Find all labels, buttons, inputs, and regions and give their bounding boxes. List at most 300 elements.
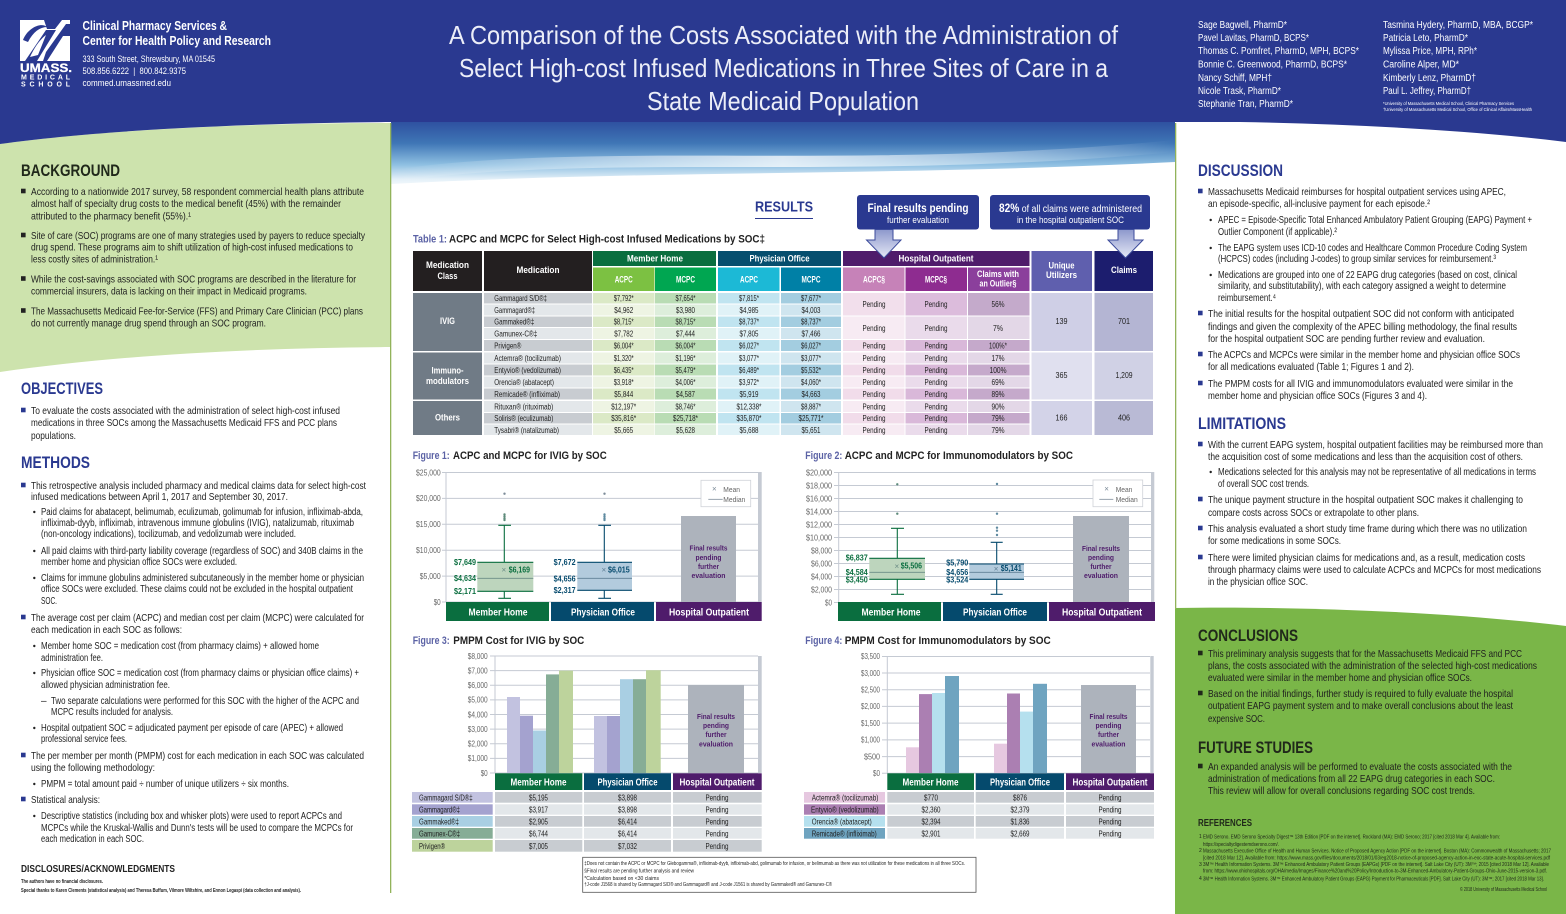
section: methods: Claims for immune globulins administered subcutaneously in the member home or physician bbox=[41, 573, 364, 584]
hospital outpatient pending block bbox=[688, 685, 744, 773]
claims with an outlier column: 69% bbox=[992, 377, 1005, 387]
figure 2 grid and axis: $0 bbox=[825, 598, 832, 607]
physician office ACPC column: $4,985 bbox=[740, 305, 759, 315]
figure 2 grid and axis: $14,000 bbox=[806, 507, 832, 516]
arrow: to hospital outpatient bbox=[866, 230, 901, 258]
section: methods: Two separate calculations were performed for this SOC with the higher of the ACPC and bbox=[51, 696, 359, 707]
section: objectives: To evaluate the costs associated with the administration of select high-cost infused bbox=[31, 406, 340, 417]
figure 4 data table: $770 bbox=[924, 792, 938, 802]
member home box plot: $2,171 bbox=[454, 586, 476, 596]
figure 3 data table bbox=[412, 792, 762, 852]
figure 2 category labels: Physician Office bbox=[963, 608, 1027, 618]
physician office ACPC column: $6,489* bbox=[739, 365, 759, 375]
claims with an outlier column: 79% bbox=[992, 413, 1005, 423]
figure 4 grid and axis bbox=[861, 652, 1154, 778]
section: background: BACKGROUND bbox=[21, 161, 120, 180]
figure 3 grid and axis: $2,000 bbox=[468, 740, 488, 749]
section: discussion: Outlier Component (if applicable).² bbox=[1218, 227, 1338, 238]
section: methods: All paid claims with third-party liability coverage (regardless of SOC) and 340B claims in the bbox=[41, 546, 363, 557]
hospital outpatient pending block: Final results bbox=[1090, 712, 1128, 721]
physician office ACPC column: $5,919 bbox=[740, 389, 759, 399]
section: methods: PMPM = total amount paid ÷ number of unique utilizers ÷ six months. bbox=[41, 779, 289, 790]
table header row: Unique bbox=[1048, 260, 1074, 270]
figure 4 grid and axis: $1,000 bbox=[861, 736, 880, 745]
hospital outpatient pending block: evaluation bbox=[692, 571, 726, 580]
figure 4 chart bbox=[804, 652, 1154, 839]
authors: Paul L. Jeffrey, PharmD† bbox=[1383, 86, 1471, 97]
hospital outpatient pending block: further bbox=[1098, 730, 1119, 739]
table and figure footnotes: §Final results are pending further analysis and review bbox=[584, 869, 694, 875]
medication class cells bbox=[413, 293, 482, 435]
member home box plot bbox=[454, 492, 533, 598]
section: methods: (non-oncology indications), tocilizumab, and vedolizumab were included. bbox=[41, 529, 296, 540]
authors: Tasmina Hydery, PharmD, MBA, BCGP* bbox=[1383, 20, 1533, 31]
claims column bbox=[1094, 293, 1153, 435]
physician office ACPC column: $8,737* bbox=[739, 317, 759, 327]
member home ACPC column: $12,197* bbox=[611, 402, 637, 412]
member home box plot: × bbox=[502, 566, 506, 575]
references: 1 bbox=[1199, 834, 1202, 840]
claims with an outlier column: 56% bbox=[992, 299, 1005, 309]
figure 2 legend: Median bbox=[1116, 497, 1138, 504]
figure 3 grid and axis: $6,000 bbox=[468, 681, 488, 690]
hospital outpatient ACPC column: Pending bbox=[862, 323, 886, 333]
unique utilizers column: 365 bbox=[1056, 370, 1068, 380]
section: methods: MCPC results included for analysis. bbox=[51, 707, 173, 718]
section: methods: SOC. bbox=[41, 596, 57, 607]
claims with an outlier column: 100%* bbox=[989, 340, 1007, 350]
hospital outpatient ACPC column: Pending bbox=[862, 389, 886, 399]
title bbox=[449, 20, 1119, 116]
section: background: Site of care (SOC) programs are one of many strategies used by payers to reduce specialty bbox=[31, 231, 366, 242]
figure 3 grid and axis: $5,000 bbox=[468, 696, 488, 705]
figure 4 title: PMPM Cost for Immunomodulators by SOC bbox=[845, 635, 1051, 647]
figure 3 title: PMPM Cost for IVIG by SOC bbox=[453, 635, 584, 647]
physician office box plot: $4,656 bbox=[946, 567, 969, 577]
medication name cells: Gamunex-C®‡ bbox=[494, 328, 538, 338]
section: methods: administration fee. bbox=[41, 653, 103, 664]
disclosures and acknowledgments: Special thanks to Karen Clements (statistical analysis) and Theresa Buffum, Vilmore Wiltshire, and Ennon Legaspi (data collection and analysis). bbox=[21, 888, 301, 894]
physician office box plot: $2,317 bbox=[554, 585, 576, 595]
section: limitations: for some medications in some SOCs. bbox=[1208, 536, 1341, 547]
figure 1 grid and axis: $0 bbox=[434, 598, 441, 607]
figure 3 grid and axis: $4,000 bbox=[468, 710, 488, 719]
section: limitations bbox=[1198, 414, 1543, 588]
figure 3 data table: Pending bbox=[706, 804, 729, 814]
member home MCPC column: $7,444 bbox=[676, 328, 695, 338]
authors: Caroline Alper, MD* bbox=[1383, 60, 1459, 70]
section: limitations: LIMITATIONS bbox=[1198, 414, 1286, 433]
table header row: MCPC bbox=[676, 274, 695, 284]
medication name cells: Entyvio® (vedolizumab) bbox=[494, 365, 561, 375]
callout: 82 percent of claims: 82% of all claims were administered bbox=[999, 203, 1142, 215]
figure 3 data table: Pending bbox=[706, 841, 729, 851]
figure 4 data table: $876 bbox=[1013, 792, 1027, 802]
member home MCPC column: $3,980 bbox=[676, 305, 695, 315]
figure 2 grid and axis: $16,000 bbox=[806, 494, 832, 503]
table header row: ACPC§ bbox=[863, 274, 885, 284]
hospital outpatient pending block bbox=[1081, 685, 1136, 773]
claims column: 701 bbox=[1118, 316, 1130, 326]
figure 4 grid and axis: $0 bbox=[873, 769, 880, 778]
hospital outpatient pending block: further bbox=[1090, 562, 1112, 571]
figure 3 data table: Pending bbox=[706, 792, 729, 802]
figure 4 grid and axis: $1,500 bbox=[861, 719, 880, 728]
physician office ACPC column: $5,688 bbox=[740, 425, 759, 435]
organisation block: 333 South Street, Shrewsbury, MA 01545 bbox=[82, 54, 215, 65]
physician office MCPC column: $8,887* bbox=[801, 402, 821, 412]
title: Select High-cost Infused Medications in Three Sites of Care in a bbox=[459, 53, 1108, 83]
section: background: While the cost-savings associated with SOC programs are described in the literature for bbox=[31, 274, 356, 286]
section: objectives: OBJECTIVES bbox=[21, 379, 103, 398]
figure 4 data table bbox=[804, 792, 1154, 839]
physician office ACPC column: $3,972* bbox=[739, 377, 759, 387]
member home ACPC column: $1,320* bbox=[614, 353, 634, 363]
member home ACPC column: $5,844 bbox=[614, 389, 633, 399]
medication name cells: Actemra® (tocilizumab) bbox=[494, 353, 561, 363]
hospital outpatient MCPC column: Pending bbox=[924, 389, 948, 399]
hospital outpatient ACPC column: Pending bbox=[862, 365, 886, 375]
figure 4 grid and axis: $3,500 bbox=[861, 652, 880, 661]
figure 4 category labels bbox=[887, 773, 1154, 790]
authors: Thomas C. Pomfret, PharmD, MPH, BCPS* bbox=[1198, 46, 1359, 57]
section: conclusions: expensive SOC. bbox=[1208, 714, 1265, 725]
figure 3 data table: Gamunex-C®‡ bbox=[419, 828, 460, 838]
authors: Mylissa Price, MPH, RPh* bbox=[1383, 46, 1477, 57]
section: objectives: populations. bbox=[31, 431, 76, 442]
unique utilizers column: 166 bbox=[1056, 413, 1068, 423]
member home MCPC column: $6,004* bbox=[676, 340, 696, 350]
figure 1 grid and axis: $20,000 bbox=[416, 494, 441, 503]
table header row: ACPC bbox=[615, 274, 633, 284]
table header row: Medication bbox=[426, 260, 469, 270]
member home MCPC column: $7,654* bbox=[676, 293, 696, 303]
figure 1 legend: Median bbox=[723, 497, 745, 504]
section: future studies: administration of medications from all 22 EAPG drug categories in each SOC. bbox=[1208, 774, 1495, 785]
hospital outpatient pending block: Final results bbox=[1082, 544, 1120, 553]
table 1 bbox=[413, 251, 1153, 435]
figure 3 data table: $5,195 bbox=[529, 792, 548, 802]
hospital outpatient MCPC column: Pending bbox=[924, 323, 948, 333]
organisation block: Clinical Pharmacy Services & bbox=[82, 18, 227, 33]
references: [cited 2018 Mar 12]. Available from: https://www.mass.gov/files/documents/2018/01/03/eg2018-notice-of-proposed-agency-action-in-eoc-state-acute-hospital-services.pdf bbox=[1203, 856, 1551, 862]
figure 4 title: Figure 4: bbox=[805, 635, 842, 647]
hospital outpatient MCPC column: Pending bbox=[924, 353, 948, 363]
figure 1 category labels: Physician Office bbox=[571, 608, 635, 618]
physician office ACPC column: $35,870* bbox=[736, 413, 762, 423]
member home MCPC column: $8,715* bbox=[676, 317, 696, 327]
hospital outpatient pending block: pending bbox=[1088, 553, 1114, 562]
callout: 82 percent of claims bbox=[990, 195, 1150, 230]
figure 3 grid and axis: $0 bbox=[481, 769, 488, 778]
organisation block bbox=[82, 18, 271, 89]
hospital outpatient MCPC column: Pending bbox=[924, 299, 948, 309]
medication name cells: Rituxan® (rituximab) bbox=[494, 402, 553, 412]
section: discussion: member home and physician office SOCs (Figures 3 and 4). bbox=[1208, 391, 1427, 402]
figure 3 grid and axis: $1,000 bbox=[468, 754, 488, 763]
member home ACPC column: $35,816* bbox=[611, 413, 637, 423]
disclosures and acknowledgments bbox=[21, 863, 301, 894]
authors: Nancy Schiff, MPH† bbox=[1198, 73, 1272, 84]
hospital outpatient MCPC column: Pending bbox=[924, 402, 948, 412]
figure 4 data table: $2,379 bbox=[1010, 804, 1030, 814]
section: objectives bbox=[21, 379, 340, 442]
figure 4 category labels: Hospital Outpatient bbox=[1072, 778, 1148, 788]
table header row: Medication bbox=[516, 265, 560, 275]
arrow: to claims bbox=[1108, 230, 1143, 258]
table header row: Utilizers bbox=[1046, 270, 1077, 280]
physician office MCPC column: $4,003 bbox=[802, 305, 821, 315]
figure 3 data table: $3,917 bbox=[529, 804, 548, 814]
claims with an outlier column: 79% bbox=[992, 425, 1005, 435]
section: future studies: This review will allow for overall conclusions regarding SOC cost trends. bbox=[1208, 786, 1475, 797]
figure 4 grid and axis: $2,500 bbox=[861, 686, 880, 694]
table header row: ACPC bbox=[740, 274, 758, 284]
hospital outpatient pending block: Final results bbox=[690, 544, 728, 553]
figure 2 title: ACPC and MCPC for Immunomodulators by SOC bbox=[845, 450, 1073, 462]
hospital outpatient pending block bbox=[681, 516, 736, 602]
callout: final results pending: Final results pending bbox=[868, 203, 968, 215]
table header row: Claims with bbox=[977, 269, 1019, 279]
figure 4 data table: $2,394 bbox=[922, 816, 941, 826]
section: methods: Paid claims for abatacept, belimumab, eculizumab, golimumab for infusion, infliximab-abda, bbox=[41, 507, 363, 518]
logo: UMass Medical School: SCHOOL bbox=[21, 82, 71, 88]
figure 3 chart bbox=[412, 652, 762, 852]
figure 2 grid and axis bbox=[806, 468, 1154, 607]
figure 4 data table: $2,901 bbox=[922, 828, 941, 838]
section: methods: Statistical analysis: bbox=[31, 795, 100, 806]
hospital outpatient ACPC column: Pending bbox=[862, 377, 886, 387]
physician office MCPC column: $4,060* bbox=[801, 377, 821, 387]
figure 3 data table: Pending bbox=[706, 816, 729, 826]
medication class cells: Immuno- bbox=[432, 365, 464, 375]
physician office MCPC column: $4,663 bbox=[802, 389, 821, 399]
member home box plot: $3,450 bbox=[846, 575, 868, 585]
physician office MCPC column: $25,771* bbox=[798, 413, 824, 423]
table header row: an Outlier§ bbox=[980, 279, 1016, 289]
figure 3 category labels: Hospital Outpatient bbox=[680, 778, 755, 788]
section: methods: each medication in each SOC. bbox=[41, 834, 144, 845]
section: objectives: medications in three SOCs among the Massachusetts Medicaid FFS and PCC plans bbox=[31, 418, 337, 429]
section: methods: allowed physician administration fee. bbox=[41, 680, 170, 691]
figure 4 data table: $2,669 bbox=[1010, 828, 1030, 838]
physician office box plot: $6,015 bbox=[608, 565, 630, 575]
claims with an outlier column: 7% bbox=[993, 323, 1003, 333]
section: methods bbox=[21, 453, 366, 845]
figure 2 category labels: Member Home bbox=[862, 608, 921, 618]
authors: Pavel Lavitas, PharmD, BCPS* bbox=[1198, 33, 1309, 44]
hospital outpatient MCPC column: Pending bbox=[924, 377, 948, 387]
figure 2 category labels: Hospital Outpatient bbox=[1062, 608, 1143, 618]
figure 2 legend bbox=[1093, 480, 1143, 507]
authors: Sage Bagwell, PharmD* bbox=[1198, 20, 1287, 31]
physician office box plot: $5,141 bbox=[1001, 563, 1022, 573]
figure 3 data table: $7,032 bbox=[618, 841, 637, 851]
figure 1 category labels: Member Home bbox=[468, 608, 528, 618]
hospital outpatient pending block: evaluation bbox=[1084, 571, 1118, 580]
figure 4 data table: Remicade® (infliximab) bbox=[812, 828, 877, 838]
right column rule bbox=[1175, 123, 1176, 609]
physician office ACPC column: $12,338* bbox=[736, 402, 762, 412]
physician office box plot: $4,656 bbox=[554, 574, 576, 584]
figure 3 data table: $6,414 bbox=[618, 828, 637, 838]
claims column: 1,209 bbox=[1116, 370, 1133, 380]
member home MCPC column: $8,746* bbox=[676, 402, 696, 412]
section: methods: using the following methodology: bbox=[31, 763, 155, 774]
member home box plot: $4,634 bbox=[454, 573, 476, 583]
panel: background bbox=[0, 123, 390, 372]
physician office bars bbox=[994, 684, 1047, 773]
figure 3 category labels bbox=[495, 773, 762, 790]
disclosures and acknowledgments: DISCLOSURES/ACKNOWLEDGMENTS bbox=[21, 863, 175, 875]
figure 4 category labels: Physician Office bbox=[990, 778, 1050, 788]
figure 2 chart bbox=[806, 468, 1155, 621]
section: conclusions: evaluated were similar in the member home and physician office SOCs. bbox=[1208, 673, 1472, 684]
figure 1 title: ACPC and MCPC for IVIG by SOC bbox=[453, 450, 607, 462]
table 1 title: ACPC and MCPC for Select High-cost Infused Medications by SOC‡ bbox=[449, 234, 765, 246]
table header row: Hospital Outpatient bbox=[898, 254, 974, 264]
physician office ACPC column: $3,077* bbox=[739, 353, 759, 363]
figure 2 legend: Mean bbox=[1116, 487, 1132, 494]
hospital outpatient pending block: further bbox=[698, 562, 719, 571]
physician office MCPC column bbox=[781, 293, 841, 435]
section: background: less costly sites of administration.¹ bbox=[31, 254, 158, 266]
table header row: MCPC§ bbox=[925, 274, 947, 284]
hospital outpatient ACPC column: Pending bbox=[862, 402, 886, 412]
figure 3 grid and axis: $7,000 bbox=[468, 666, 488, 675]
figure 3 data table: Gammagard®‡ bbox=[419, 804, 460, 814]
section: methods: infliximab-dyyb, infliximab, intravenous immune globulins (IVIG), natalizumab, rituximab bbox=[41, 518, 354, 529]
hospital outpatient MCPC column: Pending bbox=[924, 425, 948, 435]
table 1 title: Table 1: bbox=[413, 234, 447, 246]
figure 1 legend: × bbox=[712, 484, 717, 494]
section: background: commercial insurers, data is lacking on their impact in Medicaid programs. bbox=[31, 286, 307, 298]
figure 1 category labels bbox=[446, 602, 762, 621]
figure 4 data table: Entyvio® (vedolizumab) bbox=[811, 804, 879, 814]
section: methods: – bbox=[41, 696, 47, 707]
section: discussion: for all medications evaluated (Table 1; Figures 1 and 2). bbox=[1208, 362, 1414, 373]
hospital outpatient ACPC column bbox=[843, 293, 904, 435]
references: 2 bbox=[1199, 848, 1202, 854]
figure 1 title: Figure 1: bbox=[413, 450, 450, 462]
hospital outpatient MCPC column: Pending bbox=[924, 413, 948, 423]
figure 2 grid and axis: $8,000 bbox=[811, 546, 832, 555]
medication name cells: Gammaked®‡ bbox=[494, 317, 534, 327]
medication name cells: Privigen® bbox=[494, 340, 522, 350]
section: methods: MCPCs while the Kruskal-Wallis and Dunn's tests will be used to compare the MCPCs for bbox=[41, 823, 354, 834]
figure 2 grid and axis: $10,000 bbox=[806, 533, 832, 542]
results heading: RESULTS bbox=[755, 198, 813, 216]
figure 2 title: Figure 2: bbox=[805, 450, 842, 462]
references: https://specialtydigestemdserono.com/. bbox=[1203, 842, 1279, 848]
table header row: Class bbox=[438, 271, 458, 281]
figure 4 data table: Actemra® (tocilizumab) bbox=[812, 792, 879, 802]
member home box plot: $6,169 bbox=[509, 565, 530, 575]
section: methods: office SOCs were excluded. These claims could not be excluded in the hospital outpatient bbox=[41, 584, 353, 595]
figure 1 category labels: Hospital Outpatient bbox=[669, 608, 750, 618]
figure 3 data table: $6,414 bbox=[618, 816, 637, 826]
physician office box plot: × bbox=[602, 566, 606, 575]
physician office MCPC column: $5,651 bbox=[802, 425, 821, 435]
member home box plot: $6,837 bbox=[846, 553, 868, 563]
figure 3 grid and axis: $3,000 bbox=[468, 725, 488, 734]
physician office bars bbox=[594, 670, 661, 773]
table and figure footnotes bbox=[583, 857, 976, 892]
hospital outpatient MCPC column bbox=[906, 293, 967, 435]
unique utilizers column bbox=[1032, 293, 1092, 435]
logo: UMass Medical School: MEDICAL bbox=[21, 74, 71, 82]
section: background: The Massachusetts Medicaid Fee-for-Service (FFS) and Primary Care Clinician (PCC) plans bbox=[31, 306, 363, 318]
header band bbox=[0, 0, 1566, 144]
member home box plot: $7,649 bbox=[454, 557, 476, 567]
figure 1 legend bbox=[701, 480, 751, 507]
member home ACPC column: $6,435* bbox=[614, 365, 634, 375]
section: conclusions bbox=[1198, 626, 1537, 725]
references: 3 bbox=[1199, 862, 1202, 868]
figure 2 grid and axis: $12,000 bbox=[806, 520, 832, 529]
figure 4 grid and axis: $2,000 bbox=[861, 702, 880, 711]
figure 4 data table: Pending bbox=[1098, 804, 1122, 814]
figure 1 chart bbox=[416, 468, 762, 621]
figure 1 grid and axis: $10,000 bbox=[416, 546, 441, 555]
medication class cells: Others bbox=[435, 413, 460, 423]
section: methods: Hospital outpatient SOC = adjudicated payment per episode of care (APEC) + allowed bbox=[41, 723, 343, 734]
references: 4 bbox=[1199, 876, 1202, 882]
section: methods: Descriptive statistics (including box and whisker plots) were used to report ACPCs and bbox=[41, 811, 342, 822]
table header row bbox=[413, 251, 1153, 291]
physician office MCPC column: $7,466 bbox=[802, 328, 821, 338]
claims with an outlier column: 100% bbox=[990, 365, 1007, 375]
physician office box plot bbox=[946, 483, 1024, 594]
authors: Bonnie C. Greenwood, PharmD, BCPS* bbox=[1198, 60, 1347, 70]
figure 3 title: Figure 3: bbox=[413, 635, 450, 647]
member home ACPC column: $7,782 bbox=[614, 328, 633, 338]
figure 2 grid and axis: $6,000 bbox=[811, 559, 832, 568]
section: discussion: an episode-specific, all-inclusive payment for each episode.² bbox=[1208, 199, 1430, 210]
member home ACPC column: $5,665 bbox=[614, 425, 633, 435]
panel: conclusions background bbox=[1175, 608, 1566, 914]
section: background: drug spend. These programs aim to shift utilization of high-cost infused medications to bbox=[31, 242, 353, 254]
member home box plot: $4,584 bbox=[846, 567, 868, 577]
organisation block: 508.856.6222 | 800.842.9375 bbox=[82, 66, 186, 77]
section: methods: The average cost per claim (ACPC) and median cost per claim (MCPC) were calculated for bbox=[31, 613, 364, 624]
references: EMD Serono. EMD Serono Specialty Digest™ 13th Edition [PDF on the internet]. Rockland (MA): EMD Serono; 2017 [cited 2018 Mar 4]. Available from: bbox=[1203, 834, 1500, 840]
physician office ACPC column bbox=[718, 293, 780, 435]
member home MCPC column: $1,196* bbox=[676, 353, 696, 363]
member home ACPC column: $4,962 bbox=[614, 305, 633, 315]
section: discussion: reimbursement.⁴ bbox=[1218, 293, 1276, 304]
hospital outpatient pending block: pending bbox=[1096, 721, 1122, 730]
figure 3 data table: Gammagard S/D®‡ bbox=[419, 792, 473, 802]
member home bars bbox=[906, 676, 959, 773]
member home box plot bbox=[846, 483, 925, 594]
figure 1 grid and axis: $25,000 bbox=[416, 468, 441, 477]
figure 3 category labels: Physician Office bbox=[598, 778, 658, 788]
physician office box plot: $7,672 bbox=[554, 557, 576, 567]
hospital outpatient pending block: evaluation bbox=[1092, 740, 1126, 748]
organisation block: Center for Health Policy and Research bbox=[82, 33, 271, 48]
section: methods: each medication in each SOC as follows: bbox=[31, 625, 182, 636]
member home ACPC column: $6,004* bbox=[614, 340, 634, 350]
table and figure footnotes: †J-code J1568 is shared by Gammagard S/D® and Gammagard® and J-code J1561 is shared by Gammaked® and Gamunex-C® bbox=[584, 881, 832, 888]
hospital outpatient pending block: Final results bbox=[697, 712, 735, 721]
figure 3 category labels: Member Home bbox=[510, 778, 567, 788]
logo: UMass Medical School: UMASS. bbox=[20, 63, 72, 75]
table and figure footnotes: ‡Does not contain the ACPC or MCPC for Glebogamma®, infliximab-dyyb, infliximab-abd, golimumab for infusion, or belimumab as there was not utilization for these medications in all three SOCs. bbox=[584, 860, 965, 867]
section: future studies: FUTURE STUDIES bbox=[1198, 738, 1313, 757]
hospital outpatient MCPC column: Pending bbox=[924, 340, 948, 350]
physician office MCPC column: $6,027* bbox=[801, 340, 821, 350]
